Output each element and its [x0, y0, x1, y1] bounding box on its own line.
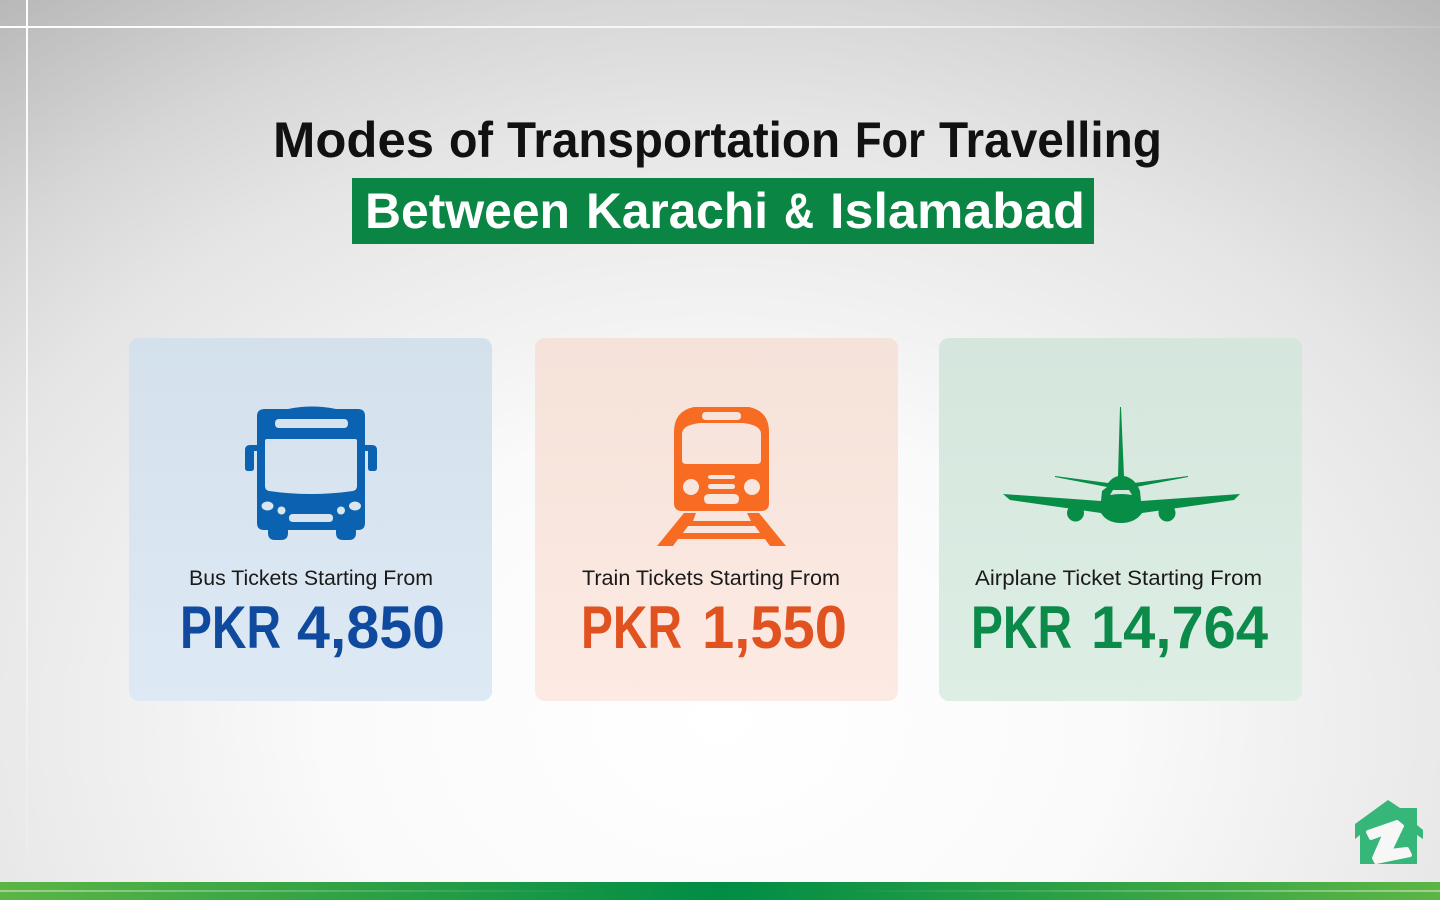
title highlight box: Karachi: [586, 183, 768, 239]
title highlight box: [352, 178, 1094, 244]
title highlight box: &: [784, 183, 814, 239]
airplane price: 14,764: [1091, 594, 1269, 661]
bus price: [180, 594, 445, 661]
airplane price: [971, 594, 1269, 661]
title line 1: For: [855, 112, 925, 168]
title highlight box: Between: [365, 183, 570, 239]
title line 1: [273, 112, 1162, 168]
logo: [1355, 800, 1423, 864]
icon: airplane: [1003, 407, 1240, 523]
train price: PKR: [581, 594, 682, 661]
icon: train: [657, 407, 786, 546]
bus price: 4,850: [297, 594, 445, 661]
bus caption: Bus Tickets Starting From: [189, 567, 433, 590]
footer bar: [0, 882, 1440, 900]
title line 1: Transportation: [507, 112, 840, 168]
title highlight box: Islamabad: [830, 183, 1085, 239]
title line 1: Travelling: [939, 112, 1162, 168]
bus price: PKR: [180, 594, 281, 661]
icon: bus: [245, 406, 377, 540]
panel: train: [535, 338, 898, 701]
title: [273, 112, 1162, 244]
airplane caption: Airplane Ticket Starting From: [975, 567, 1262, 590]
title line 1: Modes: [273, 112, 434, 168]
title line 1: of: [449, 112, 493, 168]
train price: 1,550: [702, 594, 847, 661]
train price: [581, 594, 847, 661]
train caption: Train Tickets Starting From: [582, 567, 840, 590]
panel: bus: [129, 338, 492, 701]
airplane price: PKR: [971, 594, 1072, 661]
panel: airplane: [939, 338, 1302, 701]
